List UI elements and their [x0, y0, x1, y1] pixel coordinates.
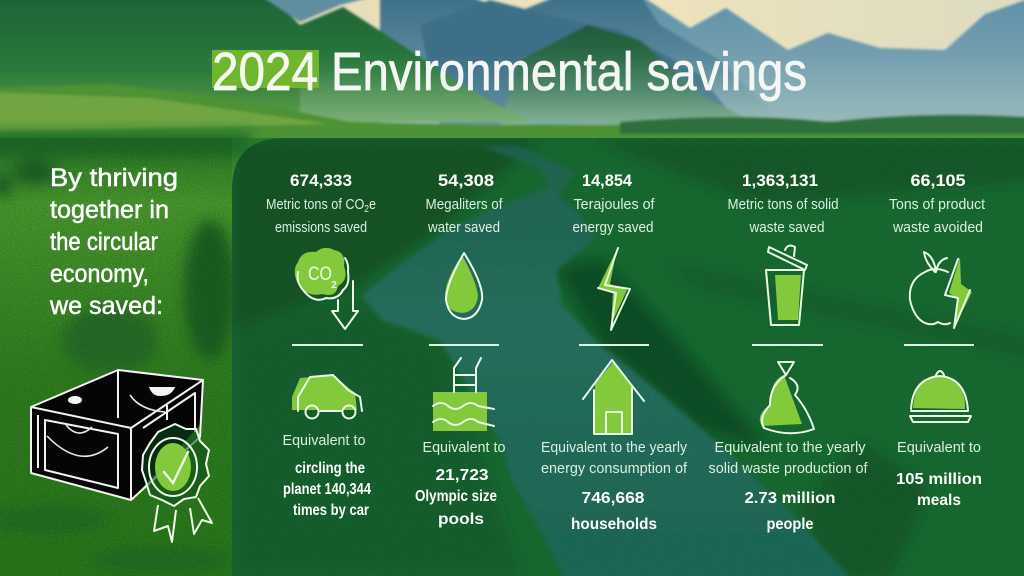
column: energy: 746,668	[582, 490, 645, 507]
column: water: 21,723	[436, 467, 489, 484]
column: CO2 emissions: planet 140,344	[283, 481, 371, 498]
intro text: the circular	[50, 228, 158, 256]
column: energy: households	[571, 516, 657, 533]
icon: water drop	[445, 253, 482, 319]
column: solid waste: waste saved	[749, 219, 824, 236]
column: water	[415, 171, 506, 528]
icon: house	[583, 360, 644, 434]
icon: lightning bolt	[598, 248, 630, 330]
icon: CO2 cloud with down arrow: 2	[331, 280, 337, 291]
intro text: By thriving	[50, 164, 178, 192]
icon: crate with certification badge	[31, 370, 212, 542]
badge	[142, 424, 212, 542]
column: energy	[541, 171, 688, 533]
column: product waste: 105 million	[896, 471, 982, 488]
column: CO2 emissions: emissions saved	[275, 219, 367, 236]
column: CO2 emissions: e	[369, 196, 376, 213]
column: product waste: Equivalent to	[897, 439, 981, 456]
intro text: economy,	[50, 260, 149, 288]
column: energy: Equivalent to the yearly	[541, 439, 687, 456]
column: solid waste: solid waste production of	[708, 460, 868, 477]
column: water: 54,308	[438, 171, 494, 190]
column: water: Megaliters of	[426, 196, 503, 213]
column: energy: Terajoules of	[574, 196, 655, 213]
column: product waste: meals	[917, 492, 961, 509]
column: water: Equivalent to	[422, 439, 506, 456]
column: solid waste: 2.73 million	[744, 490, 836, 507]
column: solid waste: Equivalent to the yearly	[714, 439, 866, 456]
column: product waste	[889, 171, 986, 509]
column: CO2 emissions: circling the	[295, 460, 365, 477]
icon: food cloche	[910, 371, 971, 422]
icon: trash bin	[766, 246, 807, 325]
column: solid waste: people	[766, 516, 814, 533]
icon: tied garbage bag	[760, 362, 814, 433]
icon: swimming pool with ladder	[433, 358, 494, 431]
column: energy: 14,854	[582, 171, 633, 190]
column: CO2 emissions: Equivalent to	[282, 432, 366, 449]
column: product waste: waste avoided	[892, 219, 983, 236]
icon: apple and lightning bolt	[910, 252, 972, 328]
icon: CO2 cloud with down arrow	[295, 248, 358, 329]
title: 2024	[212, 42, 318, 102]
column: CO2 emissions: 2	[364, 204, 369, 215]
intro text: together in	[50, 196, 169, 224]
column: CO2 emissions	[266, 171, 376, 519]
icon: CO2 cloud with down arrow: CO	[308, 264, 332, 285]
column: energy: energy consumption of	[541, 460, 688, 477]
intro text: we saved:	[49, 292, 163, 320]
column: product waste: Tons of product	[889, 196, 986, 213]
column: solid waste: 1,363,131	[742, 171, 818, 190]
column: water: Olympic size	[415, 488, 497, 505]
intro text	[49, 164, 178, 320]
column: water: water saved	[427, 219, 500, 236]
column: CO2 emissions: Metric tons of CO	[266, 196, 383, 213]
title: Environmental savings	[331, 42, 807, 102]
column: CO2 emissions: 674,333	[290, 171, 352, 190]
column: CO2 emissions: times by car	[293, 502, 369, 519]
column: water: pools	[438, 511, 484, 528]
icon: car	[292, 375, 362, 418]
column: energy: energy saved	[572, 219, 654, 236]
column: solid waste: Metric tons of solid	[728, 196, 838, 213]
panel: translucent green stats panel with river	[232, 138, 1024, 576]
column: solid waste	[708, 171, 868, 533]
column: product waste: 66,105	[910, 171, 966, 190]
